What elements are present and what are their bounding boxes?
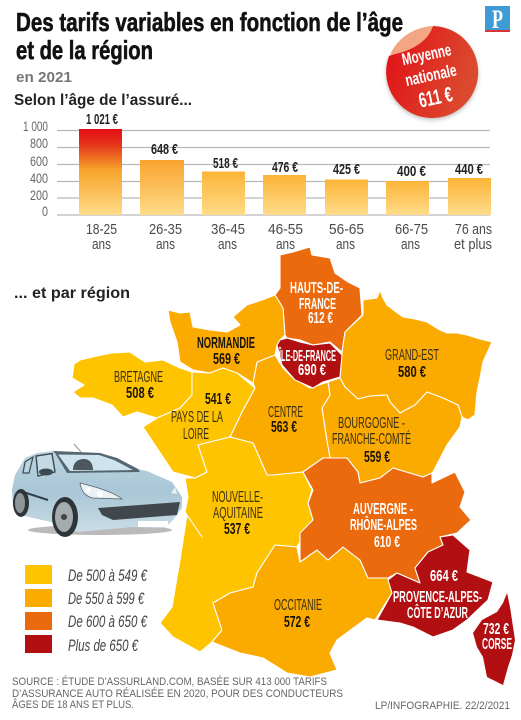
region: Île-de-France: ÎLE-DE-FRANCE bbox=[279, 346, 336, 365]
legend item: 600 to 650: De 600 à 650 € bbox=[68, 612, 148, 631]
sticker: national average bbox=[386, 26, 478, 118]
region: Centre bbox=[230, 355, 330, 475]
bar chart: rates by age: et plus bbox=[454, 236, 492, 253]
region: Grand-Est bbox=[340, 290, 492, 420]
region: Île-de-France: 690 € bbox=[298, 362, 326, 379]
region: Bretagne bbox=[72, 352, 192, 418]
bar chart: rates by age: 56-65 bbox=[329, 221, 364, 238]
region: Normandie bbox=[168, 295, 285, 383]
title bbox=[16, 7, 403, 65]
bar chart: rates by age: 46-55 bbox=[268, 221, 303, 238]
title: Des tarifs variables en fonction de l’âge bbox=[16, 7, 403, 37]
region: Auvergne-Rhône-Alpes: 610 € bbox=[374, 534, 400, 551]
bar chart: rates by age: ans bbox=[218, 236, 237, 253]
region: Pays de la Loire bbox=[143, 368, 255, 478]
region: Pays de la Loire: 541 € bbox=[205, 391, 231, 408]
bar chart: rates by age: 425 € bbox=[333, 161, 360, 178]
bar chart: rates by age: 1 000 bbox=[23, 118, 48, 134]
region: Grand-Est: GRAND-EST bbox=[385, 347, 439, 364]
bar chart: rates by age: 440 € bbox=[455, 161, 483, 178]
bar chart: rates by age: 18-25 bbox=[86, 221, 117, 238]
sticker: national average: 611 € bbox=[417, 83, 455, 113]
source note: ÂGES DE 18 ANS ET PLUS. bbox=[12, 698, 134, 711]
bar chart: rates by age: 518 € bbox=[213, 155, 238, 172]
region: Provence-Alpes-Côte d'Azur: 664 € bbox=[430, 568, 458, 585]
bar chart: rates by age: ans bbox=[276, 236, 295, 253]
region: Pays de la Loire: PAYS DE LA bbox=[171, 409, 223, 426]
bar chart: rates by age: 476 € bbox=[272, 159, 298, 176]
region: Nouvelle-Aquitaine: NOUVELLE- bbox=[212, 489, 263, 506]
bar chart: rates by age: ans bbox=[156, 236, 175, 253]
region: Bourgogne-Franche-Comté: BOURGOGNE - bbox=[338, 415, 405, 432]
bar chart: rates by age: 400 € bbox=[397, 163, 427, 180]
map of France bbox=[72, 247, 515, 685]
bar chart: rates by age: 200 bbox=[30, 187, 48, 203]
region: Normandie: NORMANDIE bbox=[197, 335, 255, 352]
region: Provence-Alpes-Côte d'Azur bbox=[377, 535, 493, 637]
bar chart: rates by age bbox=[23, 111, 492, 253]
region: Hauts-de-France: HAUTS-DE- bbox=[290, 280, 343, 297]
region: Bourgogne-Franche-Comté: 559 € bbox=[364, 449, 390, 466]
legend item: 550 to 599: De 550 à 599 € bbox=[68, 589, 145, 608]
region: Nouvelle-Aquitaine bbox=[160, 437, 313, 652]
region: Hauts-de-France: 612 € bbox=[308, 310, 333, 327]
bar chart: rates by age: 66-75 bbox=[395, 221, 428, 238]
region: Occitanie: 572 € bbox=[284, 614, 310, 631]
region: Hauts-de-France bbox=[275, 247, 362, 352]
sticker: national average: nationale bbox=[403, 61, 458, 90]
icon: car bbox=[12, 444, 182, 537]
sticker: national average: Moyenne bbox=[400, 40, 453, 69]
region: Occitanie: OCCITANIE bbox=[274, 597, 322, 614]
region: Bretagne: BRETAGNE bbox=[114, 369, 163, 386]
bar chart: rates by age: 0 bbox=[42, 203, 48, 219]
bar chart: rates by age: 36-45 bbox=[211, 221, 245, 238]
bar chart: rates by age: ans bbox=[336, 236, 355, 253]
legend item: 500 to 549: De 500 à 549 € bbox=[68, 566, 148, 585]
region: Bourgogne-Franche-Comté: FRANCHE-COMTÉ bbox=[332, 429, 411, 448]
region: Auvergne-Rhône-Alpes: AUVERGNE - bbox=[353, 501, 413, 518]
bar chart: rates by age: 76 ans bbox=[455, 221, 492, 238]
logo: Le Parisien P: P bbox=[492, 5, 503, 34]
bar chart: rates by age: 648 € bbox=[151, 141, 178, 158]
credit: LP/INFOGRAPHIE. 22/2/2021 bbox=[375, 700, 510, 712]
region: Nouvelle-Aquitaine: AQUITAINE bbox=[213, 505, 263, 522]
bar chart: rates by age: 400 bbox=[30, 170, 48, 186]
bar chart: rates by age: 1 021 € bbox=[86, 111, 118, 128]
logo: Le Parisien P bbox=[485, 5, 510, 34]
region: Auvergne-Rhône-Alpes: RHÔNE-ALPES bbox=[350, 515, 417, 534]
subtitle: year: en 2021 bbox=[16, 69, 72, 86]
region: Corse bbox=[473, 593, 515, 685]
source note: SOURCE : ÉTUDE D’ASSURLAND.COM, BASÉE SUR 413 000 TARIFS bbox=[12, 675, 327, 688]
source note: D’ASSURANCE AUTO RÉALISÉE EN 2020, POUR DES CONDUCTEURS bbox=[12, 687, 343, 700]
bar chart: rates by age: 26-35 bbox=[149, 221, 182, 238]
source note bbox=[12, 675, 343, 711]
bar chart: rates by age: 800 bbox=[30, 135, 48, 151]
region: Centre: 563 € bbox=[271, 419, 297, 436]
heading: region section: ... et par région bbox=[14, 285, 130, 302]
region: Hauts-de-France: FRANCE bbox=[299, 296, 336, 313]
bar chart: rates by age: ans bbox=[92, 236, 111, 253]
region: Île-de-France bbox=[277, 338, 342, 388]
region: Bretagne: 508 € bbox=[126, 385, 154, 402]
region: Nouvelle-Aquitaine: 537 € bbox=[224, 521, 250, 538]
region: Auvergne-Rhône-Alpes bbox=[300, 458, 471, 583]
region: Occitanie bbox=[212, 545, 392, 677]
region: Bourgogne-Franche-Comté bbox=[322, 378, 462, 483]
bar chart: rates by age: ans bbox=[401, 236, 420, 253]
region: Centre: CENTRE bbox=[268, 404, 303, 421]
region: Grand-Est: 580 € bbox=[398, 364, 426, 381]
region: Pays de la Loire: LOIRE bbox=[183, 426, 209, 443]
legend item: above 650: Plus de 650 € bbox=[68, 636, 139, 655]
legend bbox=[25, 565, 148, 655]
region: Provence-Alpes-Côte d'Azur: CÔTE D’AZUR bbox=[407, 603, 468, 622]
region: Normandie: 569 € bbox=[213, 351, 240, 368]
heading: age section: Selon l’âge de l’assuré... bbox=[14, 92, 192, 109]
title: et de la région bbox=[16, 35, 153, 65]
bar chart: rates by age: 600 bbox=[30, 153, 48, 169]
